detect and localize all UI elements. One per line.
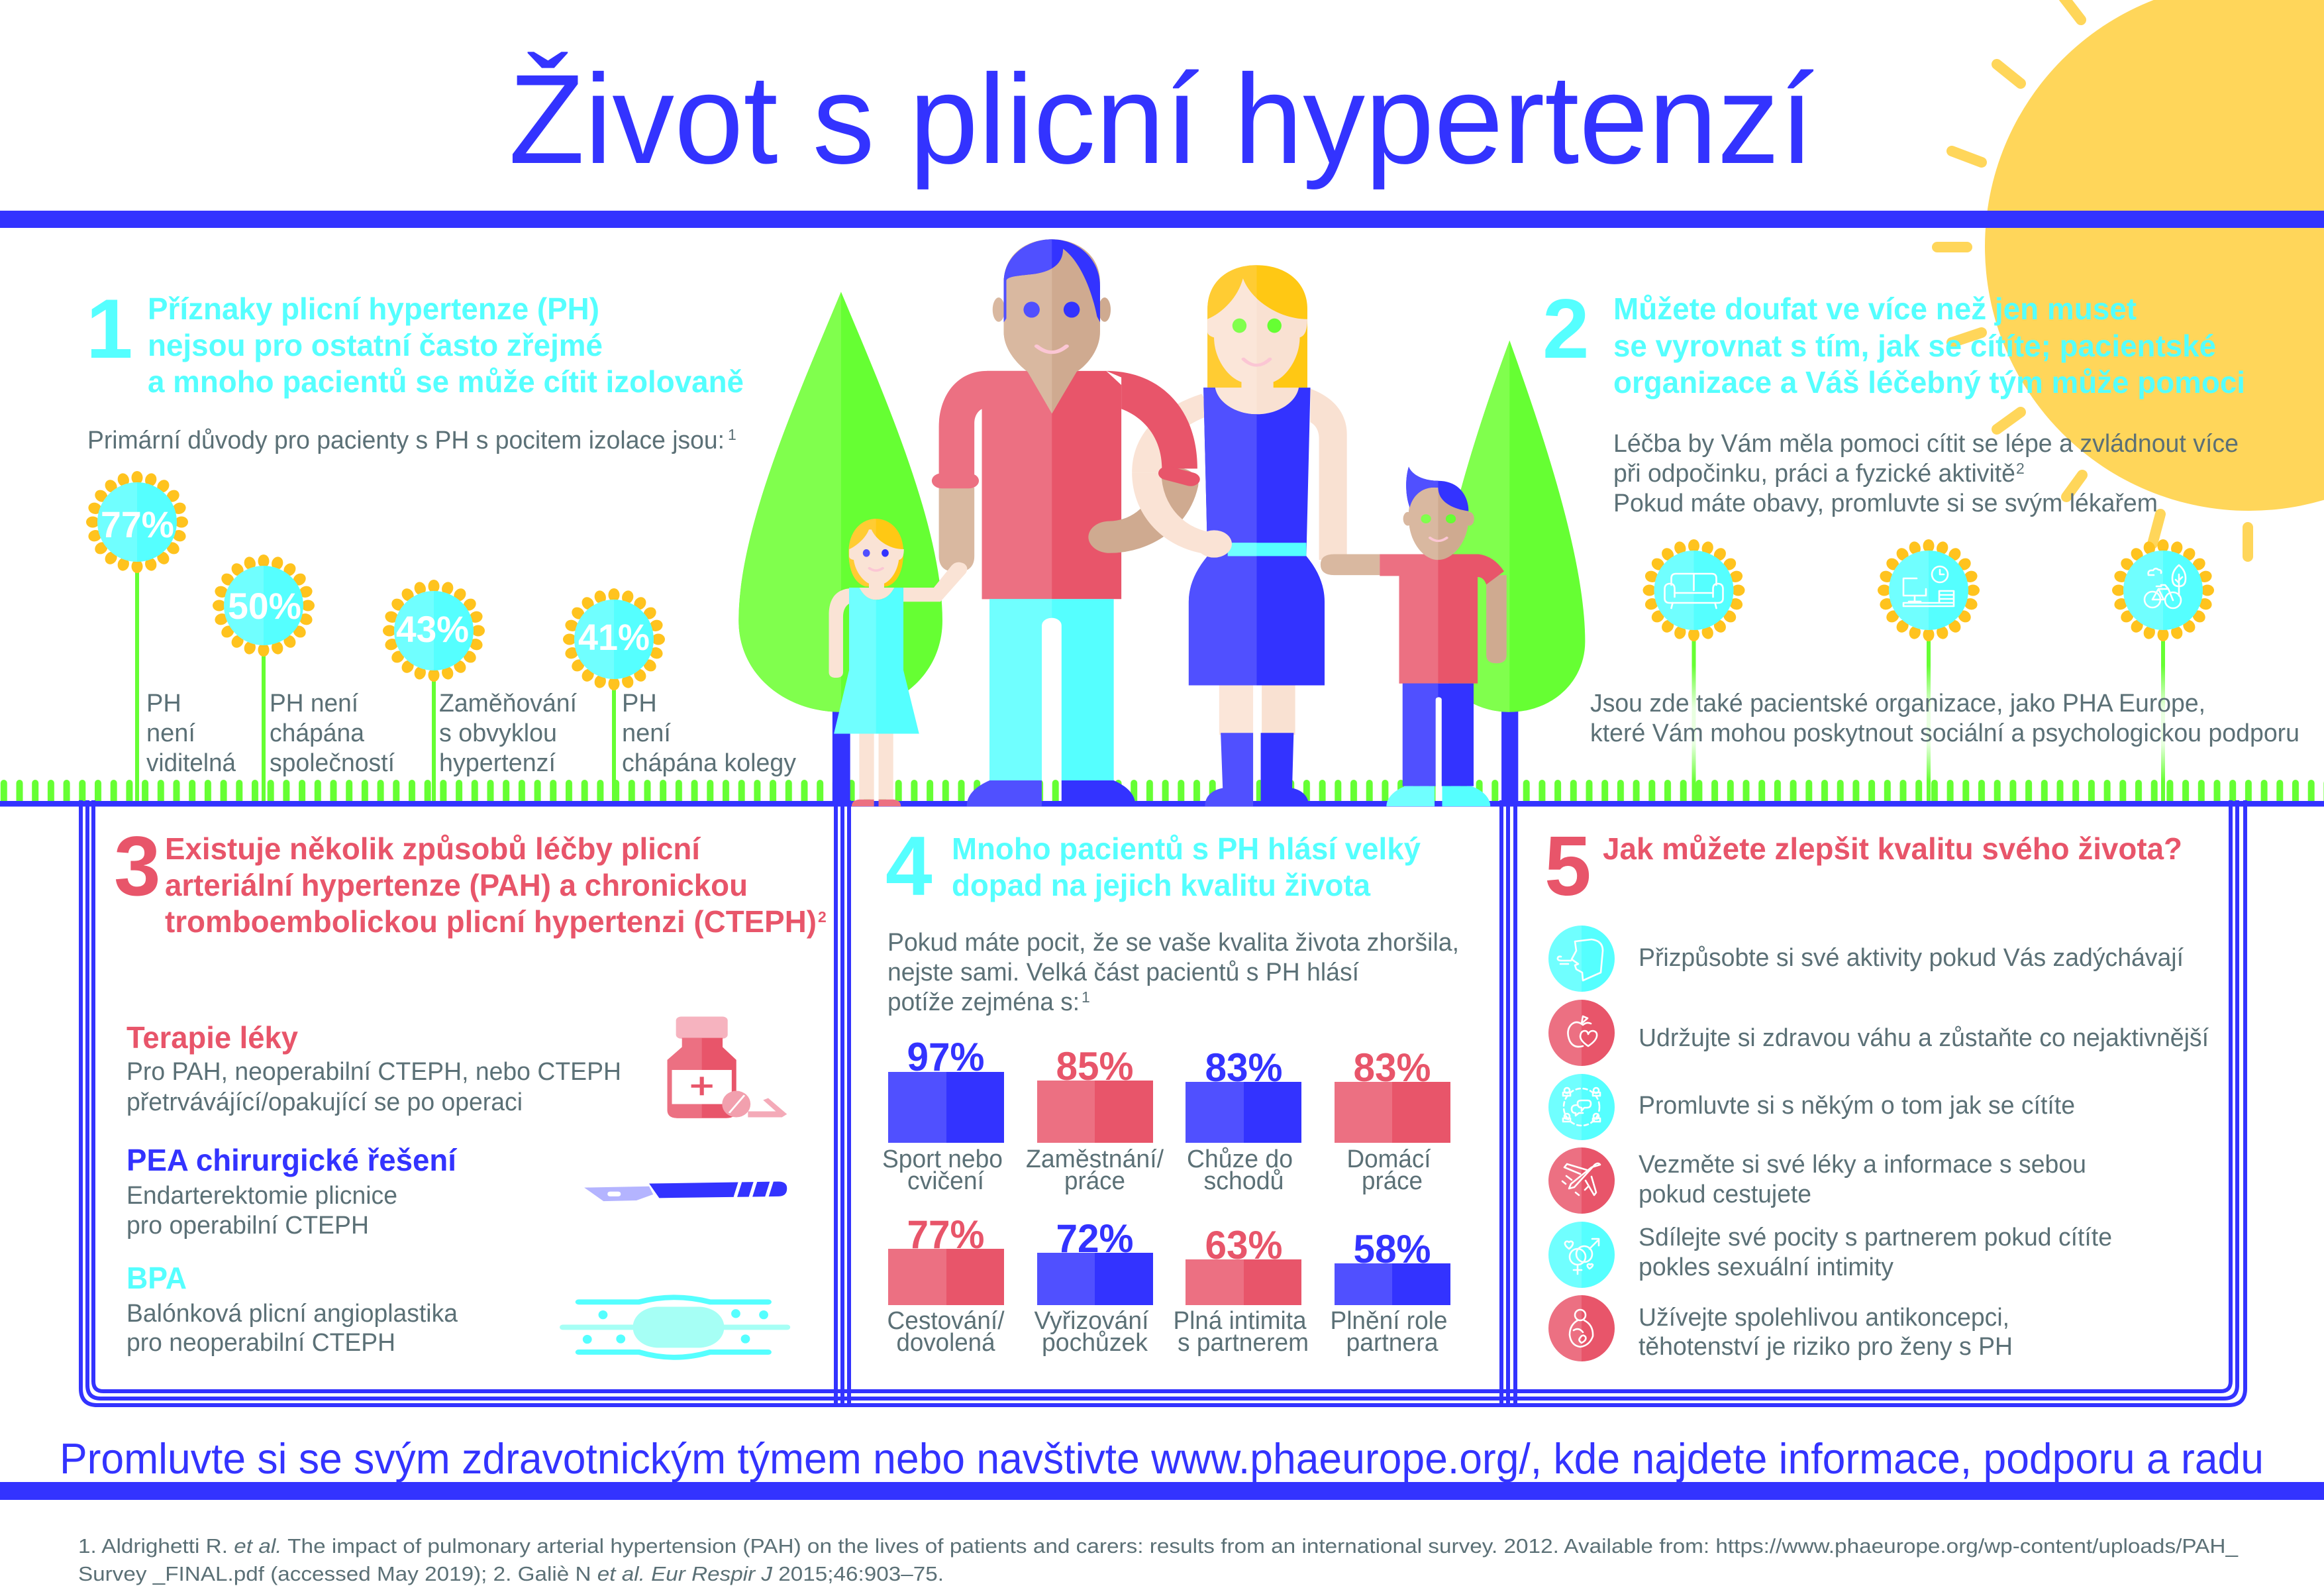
number 5: 5	[1544, 819, 1591, 913]
bar: 83% housework: práce	[1362, 1167, 1423, 1195]
treatment: drug therapy: přetrvávájící/opakující se po operaci	[126, 1088, 523, 1116]
bar: 72% errands	[1035, 1216, 1153, 1357]
tip: travel	[1548, 1147, 2086, 1214]
panel: section 3 treatments	[114, 819, 827, 1357]
flower 43%: 43%	[396, 608, 469, 650]
icon: pill bottle	[668, 1016, 787, 1118]
tip: travel: Vezměte si své léky a informace s sebou	[1639, 1151, 2086, 1179]
support text	[1590, 690, 2299, 747]
bar: 83% housework: Domácí	[1347, 1145, 1431, 1173]
flower 43%: s obvyklou	[439, 719, 557, 747]
treatment: PEA surgery: Endarterektomie plicnice	[126, 1182, 397, 1210]
icon: balloon angioplasty	[563, 1297, 787, 1357]
intro text: Primární důvody pro pacienty s PH s pocitem izolace jsou:	[87, 427, 725, 454]
heading 4: dopad na jejich kvalitu života	[952, 868, 1370, 902]
flower 77%: PH	[146, 690, 181, 717]
panel: section 1 isolation	[86, 282, 796, 802]
body text: Pokud máte obavy, promluvte si se svým lékařem	[1613, 490, 2158, 517]
heading 2: se vyrovnat s tím, jak se cítíte; pacientské	[1613, 329, 2216, 363]
man: raised sleeve	[1106, 371, 1197, 479]
bar: 83% housework: 83%	[1354, 1045, 1431, 1090]
bar: 58% partner role: 58%	[1354, 1227, 1431, 1271]
bar: 85% work: 85%	[1056, 1044, 1134, 1088]
tip: breathing: Přizpůsobte si své aktivity pokud Vás zadýchávají	[1639, 944, 2184, 972]
treatment: BPA: Balónková plicní angioplastika	[126, 1300, 458, 1328]
panel: section 5 improve quality	[1544, 819, 2209, 1361]
tip: contraception: těhotenství je riziko pro ženy s PH	[1639, 1333, 2013, 1361]
tip: healthy weight	[1548, 1000, 2209, 1066]
flower 50%: společností	[270, 749, 395, 777]
flower 43%: Zaměňování	[439, 690, 577, 717]
flower 77%: viditelná	[146, 749, 236, 777]
number 2: 2	[1542, 282, 1590, 376]
heading 3: arteriální hypertenze (PAH) a chronickou	[165, 868, 748, 902]
tip: intimacy	[1548, 1222, 2112, 1288]
tip: healthy weight: Udržujte si zdravou váhu a zůstaňte co nejaktivnější	[1639, 1024, 2209, 1052]
support text: které Vám mohou poskytnout sociální a psychologickou podporu	[1590, 719, 2299, 747]
flower 50%: PH není	[270, 690, 358, 717]
flower 50%: chápána	[270, 719, 365, 747]
bar: 97% sport: cvičení	[907, 1167, 984, 1195]
icon: sun	[1937, 0, 2324, 556]
treatment: BPA: pro neoperabilní CTEPH	[126, 1329, 395, 1357]
body text	[1613, 430, 2239, 517]
bar: 83% stairs: schodů	[1204, 1167, 1284, 1195]
treatment: drug therapy: Pro PAH, neoperabilní CTEPH, nebo CTEPH	[126, 1058, 621, 1086]
body text: Léčba by Vám měla pomoci cítit se lépe a zvládnout více	[1613, 430, 2239, 458]
bar: 58% partner role: Plnění role	[1330, 1307, 1448, 1335]
illustration: family	[829, 239, 1507, 806]
bar: 83% stairs: Chůze do	[1187, 1145, 1293, 1173]
bar: 83% housework	[1335, 1045, 1450, 1195]
boy	[1321, 466, 1507, 806]
bar: 77% travel	[887, 1212, 1005, 1357]
man	[939, 239, 1177, 806]
title: Život s plicní hypertenzí	[509, 48, 1814, 190]
heading 5: Jak můžete zlepšit kvalitu svého života?	[1603, 831, 2182, 866]
flower 41%: 41%	[578, 616, 650, 658]
body text: 1	[1082, 988, 1090, 1006]
flower 43%: hypertenzí	[439, 749, 556, 777]
flower 50%	[213, 555, 395, 802]
heading 1: nejsou pro ostatní často zřejmé	[148, 328, 603, 362]
body text: potíže zejména s:	[887, 988, 1080, 1016]
flower 43%	[383, 580, 577, 802]
treatment: BPA	[126, 1261, 458, 1357]
treatment: drug therapy	[126, 1020, 621, 1116]
bar: 97% sport	[882, 1035, 1004, 1195]
bar: 85% work	[1026, 1044, 1164, 1195]
top divider bar	[0, 211, 2324, 228]
heading 2: Můžete doufat ve více než jen muset	[1613, 291, 2137, 326]
bar: 72% errands: pochůzek	[1042, 1329, 1148, 1357]
bottom divider bar	[0, 1482, 2324, 1500]
flower 77%: 77%	[101, 503, 174, 545]
tip: contraception: Užívejte spolehlivou antikoncepci,	[1639, 1304, 2009, 1332]
treatment: BPA: BPA	[126, 1261, 187, 1295]
bar: 63% intimacy: Plná intimita	[1174, 1307, 1307, 1335]
bar: 97% sport: Sport nebo	[882, 1145, 1003, 1173]
support text: Jsou zde také pacientské organizace, jako PHA Europe,	[1590, 690, 2205, 717]
flower: desk icon	[1878, 539, 1980, 802]
heading 4: Mnoho pacientů s PH hlásí velký	[952, 831, 1421, 866]
tip: talk: Promluvte si s někým o tom jak se cítíte	[1639, 1092, 2075, 1120]
girl	[829, 519, 967, 806]
flower 41%	[563, 588, 796, 802]
panel: section 4 quality of life	[882, 819, 1459, 1357]
heading 3: 2	[818, 908, 827, 926]
body text: Pokud máte pocit, že se vaše kvalita života zhoršila,	[887, 929, 1459, 957]
bar: 97% sport: 97%	[907, 1035, 984, 1079]
bar: 63% intimacy	[1174, 1223, 1309, 1357]
heading 2	[1613, 291, 2245, 399]
flower: sofa icon	[1642, 539, 1744, 802]
body text: 2	[2016, 460, 2025, 477]
references: Survey _FINAL.pdf (accessed May 2019); 2. Galiè N et al. Eur Respir J 2015;46:903–75.	[78, 1563, 944, 1585]
tip: contraception	[1548, 1295, 2013, 1361]
body text: nejste sami. Velká část pacientů s PH hlásí	[887, 959, 1359, 986]
treatment: PEA surgery	[126, 1143, 458, 1240]
flower 41%: chápána kolegy	[622, 749, 796, 777]
tip: talk	[1548, 1074, 2075, 1140]
grass strip	[0, 780, 2324, 802]
bar: 63% intimacy: s partnerem	[1178, 1329, 1309, 1357]
heading 1	[148, 291, 744, 399]
bar: 77% travel: dovolená	[897, 1329, 995, 1357]
bar: 85% work: Zaměstnání/	[1026, 1145, 1164, 1173]
bar: 83% stairs: 83%	[1205, 1045, 1282, 1090]
bar: 58% partner role	[1330, 1227, 1450, 1357]
body text: při odpočinku, práci a fyzické aktivitě	[1613, 460, 2015, 488]
heading 2: organizace a Váš léčebný tým může pomoci	[1613, 365, 2245, 399]
tip: intimacy: Sdílejte své pocity s partnerem pokud cítíte	[1639, 1224, 2112, 1251]
bar: 72% errands: Vyřizování	[1035, 1307, 1149, 1335]
illustration: trees	[738, 291, 1585, 803]
body text	[887, 929, 1459, 1016]
flower 50%: 50%	[228, 585, 301, 627]
heading 1: Příznaky plicní hypertenze (PH)	[148, 291, 599, 326]
ground line	[0, 801, 2324, 807]
references	[78, 1535, 2239, 1585]
bar: 63% intimacy: 63%	[1205, 1223, 1282, 1267]
references: 1. Aldrighetti R. et al. The impact of pulmonary arterial hypertension (PAH) on the lives of patients and carers: results from an international survey. 2012. Available from: https://www.phaeurope.org/wp-content/uploads/PAH_	[78, 1535, 2239, 1558]
treatment: PEA surgery: pro operabilní CTEPH	[126, 1212, 369, 1240]
flower: bicycle icon	[2112, 539, 2214, 802]
bar: 83% stairs	[1186, 1045, 1301, 1195]
flower 41%: není	[622, 719, 671, 747]
bar: 72% errands: 72%	[1056, 1216, 1134, 1261]
number 1: 1	[86, 282, 133, 376]
panel frames	[81, 800, 2245, 1405]
bar: 85% work: práce	[1064, 1167, 1125, 1195]
tip: intimacy: pokles sexuální intimity	[1639, 1253, 1894, 1281]
panel: section 2 hope	[1542, 282, 2299, 802]
flower 41%: PH	[622, 690, 657, 717]
heading 3	[165, 831, 827, 939]
flower 77%: není	[146, 719, 195, 747]
icon: scalpel	[584, 1181, 787, 1201]
tip: breathing	[1548, 926, 2184, 992]
tip: travel: pokud cestujete	[1639, 1181, 1811, 1208]
number 3: 3	[114, 819, 161, 913]
treatment: drug therapy: Terapie léky	[126, 1020, 298, 1055]
woman	[1146, 265, 1347, 806]
bar: 58% partner role: partnera	[1346, 1329, 1439, 1357]
treatment: PEA surgery: PEA chirurgické řešení	[126, 1143, 458, 1177]
heading 3: tromboembolickou plicní hypertenzi (CTEPH)	[165, 904, 817, 939]
number 4: 4	[885, 819, 933, 913]
bar: 77% travel: 77%	[907, 1212, 984, 1257]
heading 4	[952, 831, 1421, 902]
call to action: Promluvte si se svým zdravotnickým týmem nebo navštivte www.phaeurope.org/, kde najdete informace, podporu a radu	[60, 1434, 2264, 1483]
intro text: 1	[728, 426, 736, 443]
flower 77%	[86, 471, 236, 802]
bar: 77% travel: Cestování/	[887, 1307, 1005, 1335]
heading 1: a mnoho pacientů se může cítit izolovaně	[148, 364, 744, 399]
heading 3: Existuje několik způsobů léčby plicní	[165, 831, 701, 866]
